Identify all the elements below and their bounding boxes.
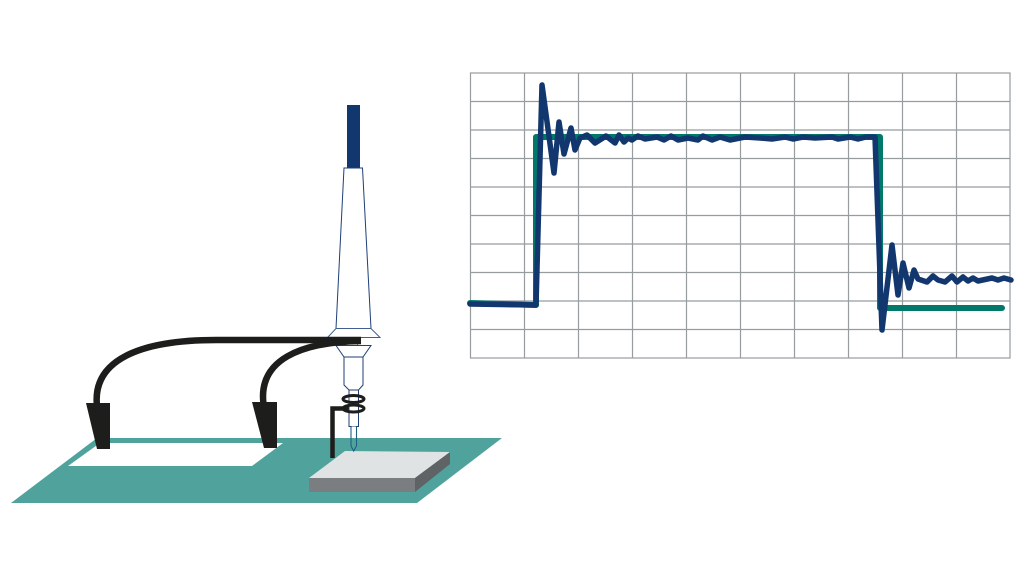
left lead wire	[97, 340, 361, 406]
board	[11, 438, 502, 503]
waveform chart	[470, 73, 1011, 358]
measured ringing wave	[470, 85, 1011, 330]
white pad on board	[68, 443, 283, 466]
right lead wire	[263, 341, 361, 404]
probe barrel	[344, 357, 363, 390]
component block	[309, 451, 450, 492]
probe tip	[351, 426, 356, 451]
probe handle	[336, 168, 371, 328]
probe funnel collar	[336, 346, 371, 357]
circuit board with probe setup	[11, 105, 502, 503]
chart grid	[470, 73, 1010, 358]
ideal square wave	[470, 137, 1002, 308]
ground rings	[343, 396, 364, 412]
left clip	[86, 403, 110, 449]
probe cable	[347, 105, 360, 168]
oscilloscope probe	[328, 105, 380, 451]
probe flange	[328, 328, 380, 338]
ground lead on probe tip	[332, 408, 352, 458]
right clip	[252, 402, 277, 448]
